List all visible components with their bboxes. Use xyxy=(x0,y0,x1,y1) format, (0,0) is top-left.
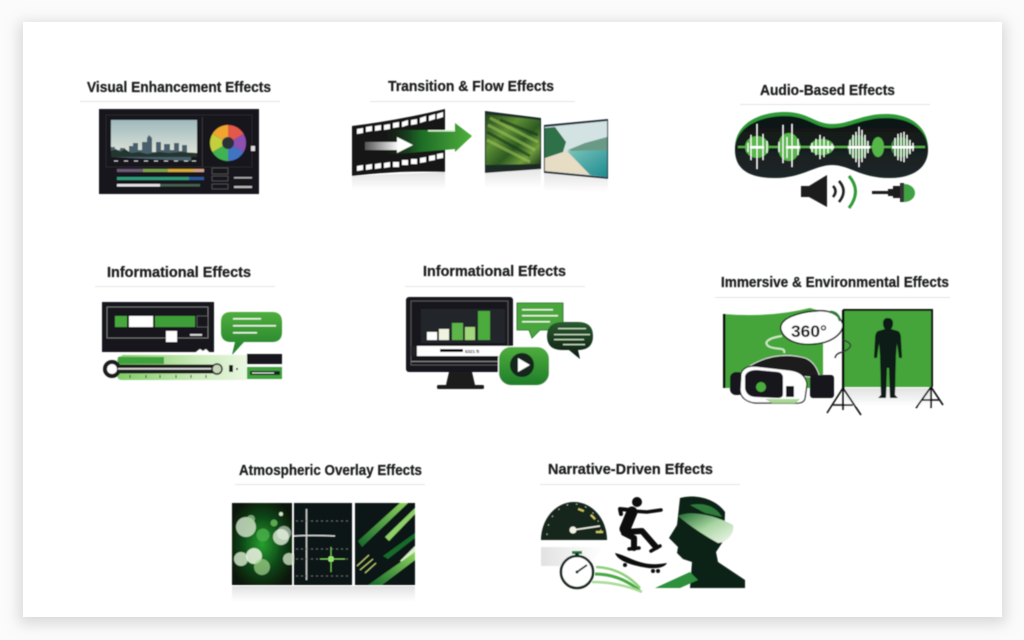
stopwatch xyxy=(561,551,593,588)
panel: transition and flow effects xyxy=(352,79,608,192)
heading: transition: Transition & Flow Effects xyxy=(388,79,554,95)
heading: narrative: Narrative-Driven Effects xyxy=(548,462,713,478)
side tags xyxy=(247,354,282,379)
tripod right xyxy=(916,387,943,408)
curved green screen xyxy=(723,308,823,388)
reflection xyxy=(232,586,415,602)
icon: microphone xyxy=(872,183,915,202)
panel: narrative-driven effects xyxy=(540,462,745,592)
waveform capsule xyxy=(735,112,928,178)
heading: atmospheric: Atmospheric Overlay Effects xyxy=(239,463,422,479)
color grading console xyxy=(99,109,259,194)
panel: informational effects left xyxy=(95,265,282,380)
gray backdrop strip xyxy=(541,547,604,566)
tripod left xyxy=(827,388,861,415)
speed streaks xyxy=(592,567,642,592)
icon: speaker xyxy=(801,175,856,208)
monitor with bar chart: 5321 ft xyxy=(465,349,480,354)
lower-third overlay screen xyxy=(102,302,214,352)
panel: audio-based effects xyxy=(735,83,930,208)
floor xyxy=(845,388,931,406)
panel: visual enhancement effects xyxy=(80,80,280,194)
panel: atmospheric overlay effects xyxy=(232,463,425,602)
screen: beach xyxy=(544,119,608,179)
arrow: green flow xyxy=(385,123,472,155)
arrow: white xyxy=(365,137,413,153)
360 bubble: 360° xyxy=(791,322,827,341)
reflection xyxy=(352,172,445,190)
heading: audio: Audio-Based Effects xyxy=(760,83,895,99)
panel: informational effects center xyxy=(405,264,593,389)
360 bubble xyxy=(766,311,850,358)
VR headset xyxy=(730,355,834,403)
heading: informational center: Informational Effects xyxy=(423,264,566,280)
overlay: light flares xyxy=(294,503,352,585)
screen: motion blur xyxy=(485,111,541,173)
dark speech bubble xyxy=(547,322,593,359)
head double exposure xyxy=(655,497,745,588)
green backdrop with silhouette xyxy=(842,310,932,398)
sliders xyxy=(117,168,252,189)
play button xyxy=(498,346,550,385)
film strip xyxy=(352,109,445,176)
heading: informational left: Informational Effects xyxy=(107,265,251,281)
gauge xyxy=(541,502,607,540)
color wheel xyxy=(210,125,255,161)
panel: immersive and environmental effects xyxy=(715,275,950,415)
timeline slider xyxy=(103,355,247,380)
speech bubble xyxy=(221,312,282,355)
heading: immersive: Immersive & Environmental Effects xyxy=(721,275,949,291)
green speech bubble xyxy=(517,303,563,338)
overlay: diagonal stripes xyxy=(355,503,415,585)
monitor with bar chart xyxy=(406,297,513,389)
heading: visual enhancement: Visual Enhancement Effects xyxy=(87,80,271,96)
skater silhouette xyxy=(615,497,667,573)
overlay: bokeh xyxy=(232,503,295,585)
